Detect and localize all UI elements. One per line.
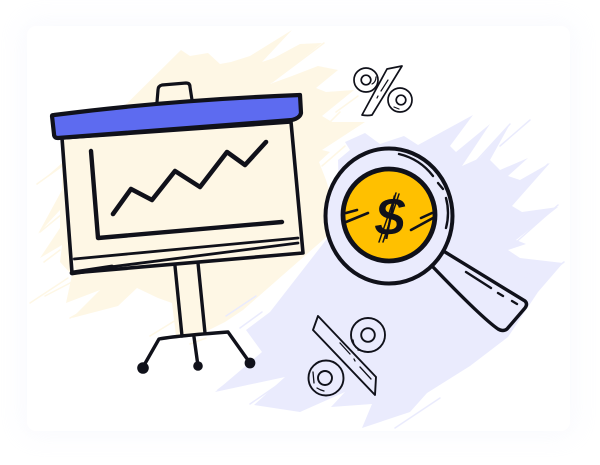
- brush stroke: yellow: [30, 30, 365, 344]
- presentation board: [52, 83, 303, 374]
- coin glints: [346, 210, 433, 230]
- card panel: [27, 26, 570, 431]
- percent icon: top: [354, 66, 412, 116]
- coin: [343, 169, 435, 261]
- stand legs: [143, 332, 250, 367]
- stand: [137, 263, 255, 374]
- brush stroke: lavender: [215, 115, 564, 428]
- board handle: [157, 83, 192, 102]
- screen bottom roll: [74, 238, 298, 267]
- magnifying glass: [326, 148, 526, 330]
- handle: [433, 252, 526, 330]
- top bar: [52, 95, 301, 138]
- dollar sign: $: [374, 187, 406, 247]
- chart trend line: [113, 142, 266, 214]
- screen: [62, 122, 303, 273]
- lens ring: [326, 148, 452, 284]
- percent icon: bottom: [308, 316, 385, 396]
- lens highlights: [399, 154, 448, 228]
- chart axes: [91, 151, 282, 238]
